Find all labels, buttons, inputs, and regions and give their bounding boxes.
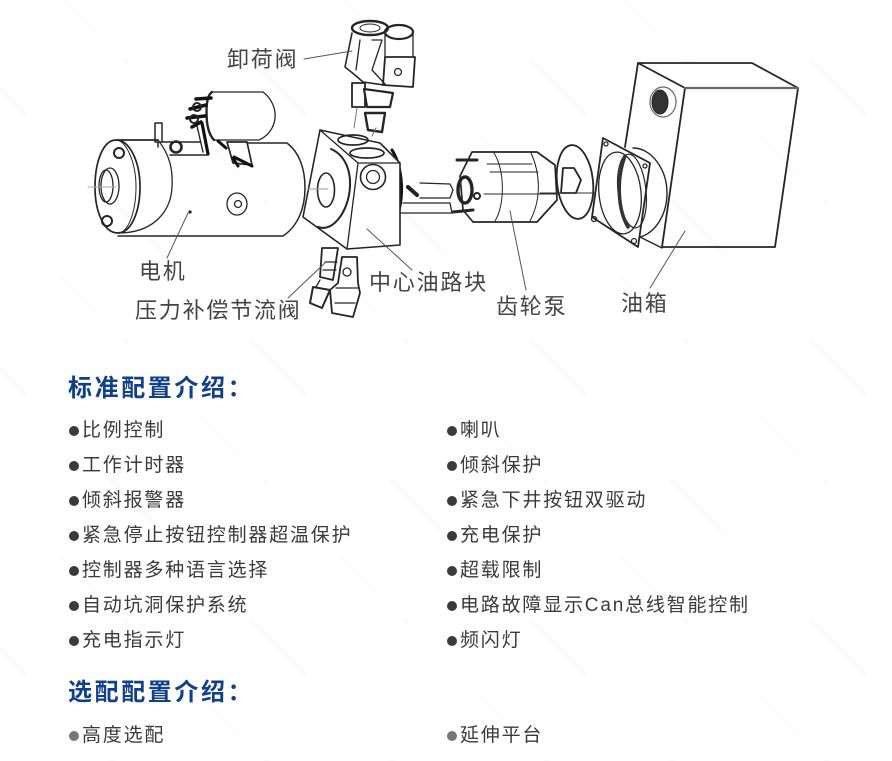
list item: 超载限制 bbox=[460, 560, 543, 581]
unloading valve bbox=[345, 21, 415, 136]
list item: 倾斜保护 bbox=[460, 455, 543, 476]
list item: 自动坑洞保护系统 bbox=[82, 595, 248, 616]
list item: 倾斜报警器 bbox=[82, 490, 186, 511]
label: gear pump: 齿轮泵 bbox=[496, 294, 567, 319]
leader lines bbox=[167, 51, 685, 298]
heading: standard configuration: 标准配置介绍： bbox=[68, 375, 254, 402]
label: pressure compensated flow valve: 压力补偿节流阀 bbox=[135, 298, 302, 323]
compensated flow valves bbox=[310, 248, 360, 317]
hydraulic power unit exploded diagram bbox=[88, 21, 798, 317]
label: oil tank: 油箱 bbox=[621, 291, 669, 316]
list item: 电路故障显示Can总线智能控制 bbox=[460, 595, 750, 616]
motor bbox=[88, 140, 305, 236]
solenoid and wiring bbox=[155, 92, 275, 166]
list item: 工作计时器 bbox=[82, 455, 186, 476]
label: unloading valve: 卸荷阀 bbox=[227, 47, 298, 72]
heading: optional configuration: 选配配置介绍： bbox=[68, 679, 254, 706]
central oil block bbox=[303, 130, 402, 249]
list item: 喇叭 bbox=[460, 420, 502, 441]
list item: 紧急停止按钮控制器超温保护 bbox=[82, 525, 352, 546]
gear pump bbox=[453, 152, 560, 222]
list item: 比例控制 bbox=[82, 420, 165, 441]
list item: 延伸平台 bbox=[460, 725, 543, 746]
list item: 充电指示灯 bbox=[82, 630, 186, 651]
gasket disc bbox=[540, 143, 625, 221]
list item: 高度选配 bbox=[82, 725, 165, 746]
list item: 紧急下井按钮双驱动 bbox=[460, 490, 647, 511]
flange plate bbox=[592, 138, 650, 247]
list item: 充电保护 bbox=[460, 525, 543, 546]
label: central oil block: 中心油路块 bbox=[369, 270, 488, 295]
list item: 控制器多种语言选择 bbox=[82, 560, 269, 581]
oil tank bbox=[625, 63, 798, 248]
list item: 频闪灯 bbox=[460, 630, 522, 651]
connecting shafts bbox=[400, 183, 453, 213]
label: motor: 电机 bbox=[139, 259, 187, 284]
